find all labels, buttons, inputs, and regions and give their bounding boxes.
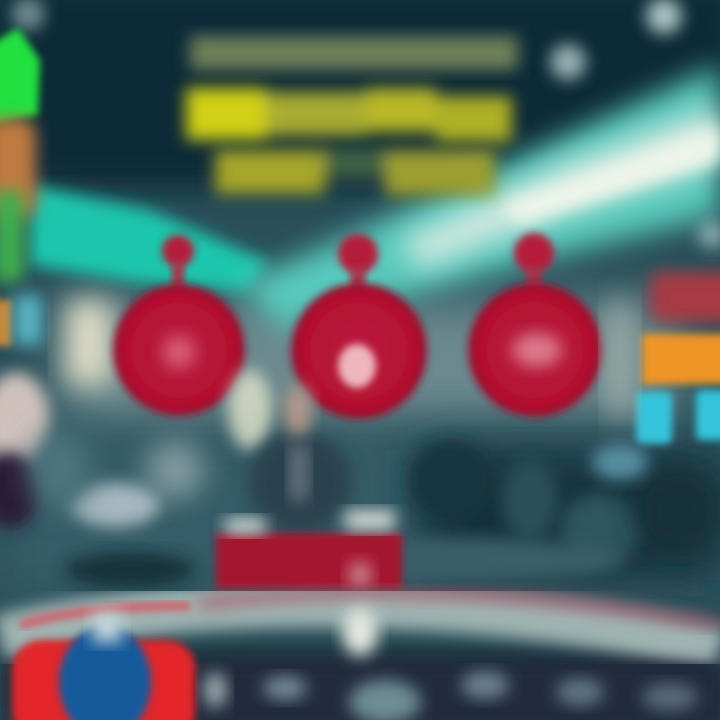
red circle 2 [291, 234, 427, 419]
curved striped counter [0, 593, 720, 650]
presenter figure [248, 384, 352, 532]
circle 3 icon [512, 333, 562, 367]
red tier [650, 272, 720, 322]
background stars [11, 0, 720, 249]
orange tier [642, 334, 720, 384]
cyan tier right [696, 390, 720, 440]
title block [186, 36, 518, 196]
title top line [190, 36, 518, 70]
circle 2 icon [338, 344, 376, 388]
title yellow main line [186, 88, 512, 142]
bottom dark row [203, 608, 720, 720]
character green collar [0, 190, 24, 282]
circle 1 icon [162, 335, 196, 369]
red circle 1 [113, 235, 245, 416]
left character [0, 28, 50, 528]
side light panel [66, 300, 112, 385]
character face [0, 118, 36, 218]
title bottom line [215, 148, 495, 196]
cyan tier left [636, 392, 672, 444]
red and blue emblem [12, 612, 196, 720]
red circle 3 [468, 233, 602, 417]
character green hat [0, 28, 40, 125]
lower crowd [30, 370, 720, 588]
red label box [216, 510, 402, 589]
right stacked panel [608, 272, 720, 444]
teal light bands [30, 65, 720, 330]
